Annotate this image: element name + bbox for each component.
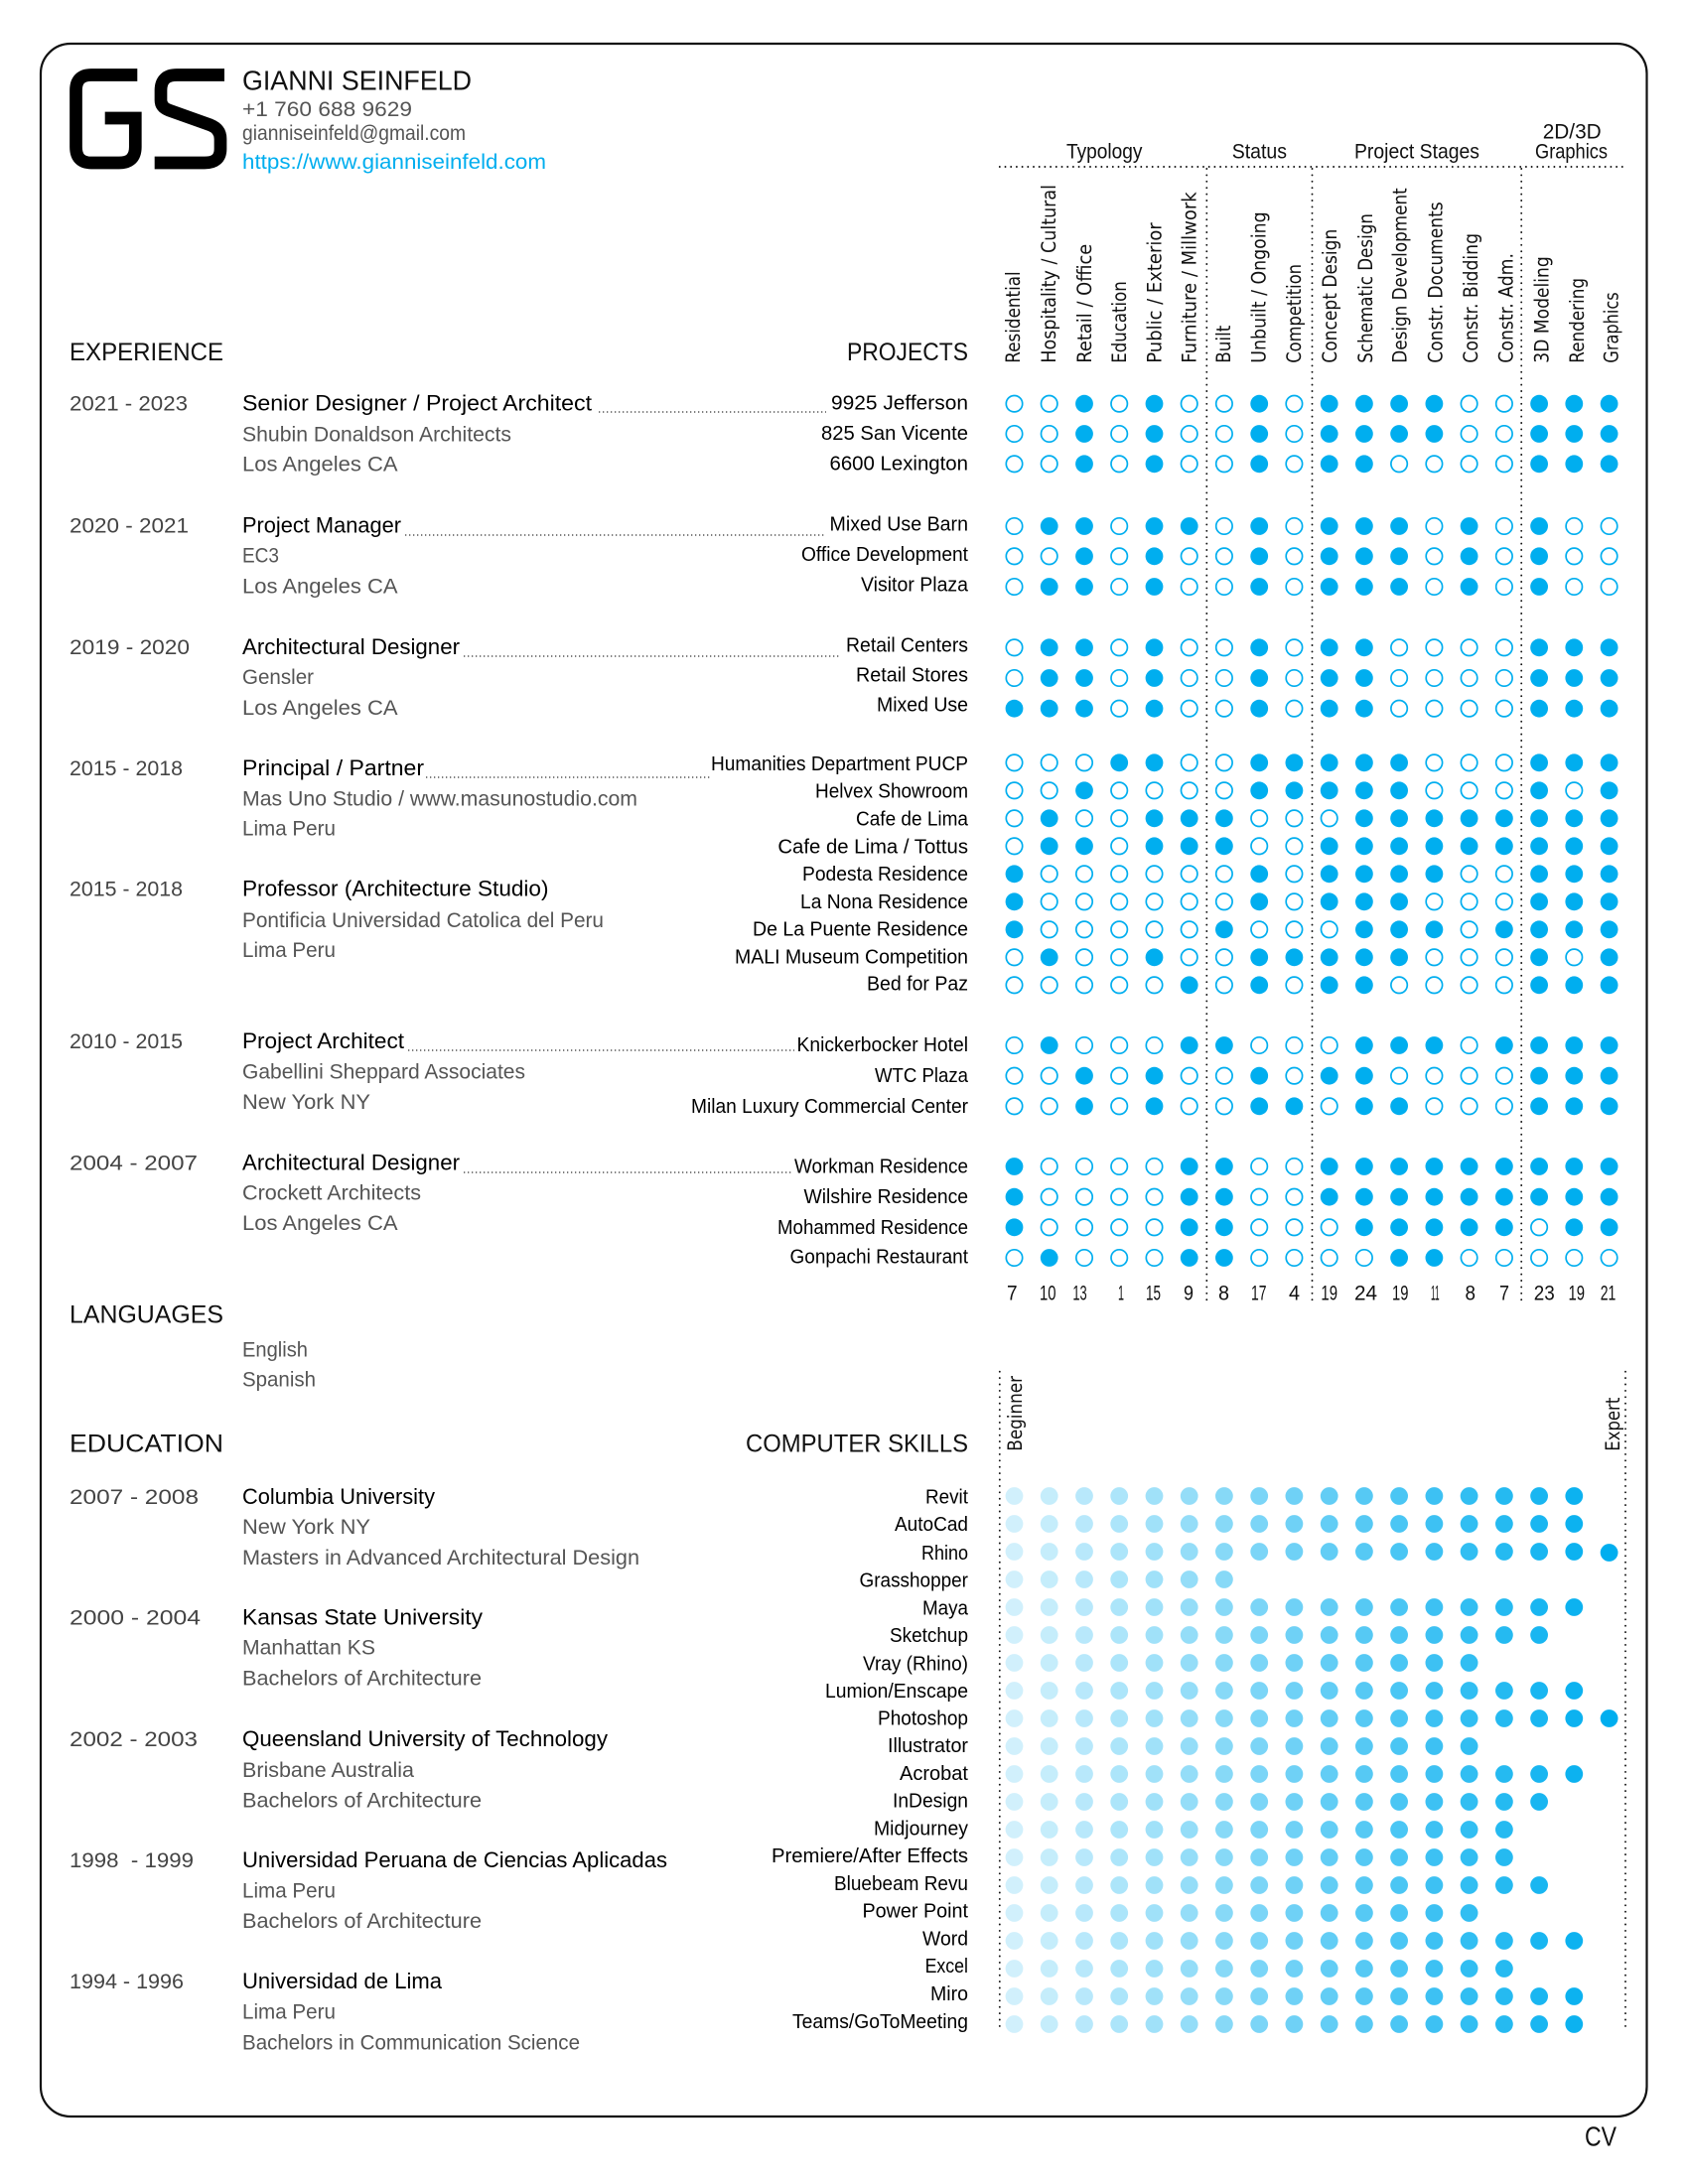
skill names: Acrobat <box>900 1762 968 1785</box>
entry: Architectural Designer, Crockett: Los Angeles CA <box>242 1212 397 1235</box>
panel: projects list: Workman Residence <box>794 1156 968 1178</box>
rotated column labels: Graphics <box>1601 292 1622 363</box>
header <box>75 66 546 174</box>
entry: Project Manager: Project Manager <box>242 513 401 538</box>
entry: Project Manager <box>70 513 826 599</box>
rotated column labels <box>1002 185 1622 363</box>
panel: projects list: Cafe de Lima <box>856 807 969 830</box>
entry: Professor <box>70 877 604 962</box>
entry: Queensland <box>70 1726 608 1813</box>
scale label: expert: Expert <box>1602 1397 1624 1451</box>
heading: education: EDUCATION <box>70 1431 223 1458</box>
category headers: Status <box>1232 140 1287 163</box>
entry: Professor: Professor (Architecture Studio) <box>242 877 548 901</box>
entry: Peruana <box>70 1847 667 1933</box>
panel: projects list: Milan Luxury Commercial Center <box>691 1095 968 1118</box>
panel: projects list <box>691 339 969 1269</box>
entry: Kansas State: Bachelors of Architecture <box>242 1668 482 1691</box>
rotated column labels: Retail / Office <box>1073 244 1096 363</box>
skill names: Teams/GoToMeeting <box>792 2010 968 2033</box>
column totals: 24 <box>1354 1282 1377 1304</box>
entry: Architectural Designer, Gensler <box>70 634 841 720</box>
heading: languages: LANGUAGES <box>70 1300 223 1328</box>
category headers: Graphics <box>1535 140 1608 163</box>
entry: Peruana: Bachelors of Architecture <box>242 1910 482 1933</box>
rotated column labels: Rendering <box>1566 278 1589 363</box>
entry: Senior Designer: Senior Designer / Project Architect <box>242 390 592 415</box>
name: GIANNI SEINFELD <box>242 66 472 96</box>
entry: Project Architect: Gabellini Sheppard Associates <box>242 1060 525 1084</box>
panel: projects list: Humanities Department PUCP <box>711 752 968 775</box>
entry: Architectural Designer, Gensler: 2019 - 2020 <box>70 636 190 659</box>
skill names: Miro <box>930 1982 968 2005</box>
entry: Lima: Bachelors in Communication Science <box>242 2031 580 2055</box>
rotated column labels: Furniture / Millwork <box>1178 192 1201 363</box>
entry: Peruana: Lima Peru <box>242 1880 336 1902</box>
panel: languages: Spanish <box>242 1369 316 1392</box>
panel: projects list: Podesta Residence <box>802 863 968 886</box>
panel: projects list: Helvex Showroom <box>815 780 968 802</box>
entry: Project Manager: 2020 - 2021 <box>70 515 189 538</box>
panel: projects list: 9925 Jefferson <box>831 392 968 415</box>
rotated column labels: Unbuilt / Ongoing <box>1248 211 1271 363</box>
skill names: AutoCad <box>895 1513 968 1536</box>
skill names: Revit <box>925 1485 968 1508</box>
entry: Queensland: Queensland University of Technology <box>242 1726 608 1751</box>
entry: Lima <box>70 1969 580 2055</box>
rotated column labels: Competition <box>1283 264 1306 363</box>
entry: Professor: Pontificia Universidad Catolica del Peru <box>242 909 604 932</box>
column totals: 7 <box>1007 1282 1018 1304</box>
entry: Architectural Designer, Gensler: Architectural Designer <box>242 634 460 659</box>
entry: Project Architect: New York NY <box>242 1091 370 1114</box>
entry: Queensland: 2002 - 2003 <box>70 1728 198 1751</box>
entry: Principal / Partner: Mas Uno Studio / www.masunostudio.com <box>242 788 637 811</box>
panel: projects list: Retail Stores <box>856 664 968 687</box>
scale label: beginner: Beginner <box>1004 1375 1027 1451</box>
skill names: Photoshop <box>878 1707 968 1729</box>
column totals: 9 <box>1184 1282 1194 1304</box>
entry: Peruana: 1998 - 1999 <box>70 1849 194 1872</box>
entry: Queensland: Bachelors of Architecture <box>242 1789 482 1813</box>
entry: Senior Designer: 2021 - 2023 <box>70 392 188 415</box>
category headers: Typology <box>1066 140 1143 163</box>
panel: projects list: Retail Centers <box>846 634 968 657</box>
entry: Architectural Designer, Gensler: Gensler <box>242 666 314 689</box>
panel: projects list: De La Puente Residence <box>753 918 968 941</box>
panel: experience <box>70 339 841 1235</box>
panel: projects list: Gonpachi Restaurant <box>790 1245 968 1269</box>
entry: Columbia <box>70 1484 639 1570</box>
column totals: 7 <box>1499 1282 1509 1304</box>
entry: Architectural Designer, Crockett: Crockett Architects <box>242 1181 421 1205</box>
skill names: Grasshopper <box>860 1570 968 1592</box>
panel: projects list: 6600 Lexington <box>830 452 968 475</box>
skill names: Lumion/Enscape <box>825 1680 968 1703</box>
CV label: CV <box>1585 2121 1617 2152</box>
entry: Architectural Designer, Crockett: Architectural Designer <box>242 1151 460 1175</box>
column totals: 11 <box>1431 1282 1440 1304</box>
entry: Principal / Partner <box>70 755 710 841</box>
skill names: Illustrator <box>888 1734 968 1757</box>
entry: Principal / Partner: Principal / Partner <box>242 755 424 780</box>
entry: Lima: 1994 - 1996 <box>70 1971 184 1993</box>
rotated column labels: Concept Design <box>1319 229 1341 363</box>
panel: project matrix <box>1000 120 1626 1304</box>
entry: Senior Designer <box>70 390 826 477</box>
entry: Kansas State: Manhattan KS <box>242 1637 375 1660</box>
panel: languages <box>70 1300 316 1392</box>
entry: Columbia: Columbia University <box>242 1484 435 1509</box>
rotated column labels: Built <box>1212 325 1235 363</box>
column totals: 4 <box>1289 1282 1300 1304</box>
skill names: Rhino <box>921 1542 968 1565</box>
panel: projects list: Bed for Paz <box>867 973 968 995</box>
panel: projects list: Visitor Plaza <box>861 574 969 597</box>
entry: Architectural Designer, Crockett <box>70 1151 791 1235</box>
column totals: 15 <box>1146 1282 1161 1304</box>
heading: projects: PROJECTS <box>847 339 968 366</box>
skill names: Vray (Rhino) <box>863 1652 968 1675</box>
rotated column labels: Residential <box>1002 271 1025 363</box>
panel: projects list: 825 San Vicente <box>821 422 968 445</box>
entry: Principal / Partner: Lima Peru <box>242 818 336 841</box>
skill names: Power Point <box>862 1900 968 1923</box>
panel: projects list: Mohammed Residence <box>777 1216 968 1239</box>
entry: Architectural Designer, Gensler: Los Angeles CA <box>242 697 397 720</box>
category headers <box>1066 120 1608 163</box>
column totals: 8 <box>1466 1282 1476 1304</box>
skill names: Word <box>922 1928 968 1950</box>
column totals: 10 <box>1040 1282 1056 1304</box>
entry: Professor: Lima Peru <box>242 939 336 962</box>
column totals: 8 <box>1218 1282 1229 1304</box>
category headers: 2D/3D <box>1543 120 1602 143</box>
heading: computer skills: COMPUTER SKILLS <box>746 1431 968 1458</box>
entry: Columbia: 2007 - 2008 <box>70 1486 199 1509</box>
dot grid <box>1006 395 1618 1267</box>
panel: projects list: WTC Plaza <box>875 1064 969 1087</box>
panel: projects list: Mixed Use <box>877 694 968 717</box>
column totals <box>1007 1282 1616 1304</box>
column totals: 23 <box>1534 1282 1555 1304</box>
icon: GS monogram logo <box>75 75 224 163</box>
entry: Columbia: New York NY <box>242 1516 370 1539</box>
entry: Kansas State <box>70 1605 483 1691</box>
entry: Professor: 2015 - 2018 <box>70 879 183 901</box>
skill names: Sketchup <box>890 1624 968 1647</box>
panel: projects list: Office Development <box>801 543 968 566</box>
rotated column labels: Public / Exterior <box>1144 221 1167 363</box>
rotated column labels: Constr. Bidding <box>1460 233 1482 363</box>
skill names: Bluebeam Revu <box>834 1872 968 1895</box>
entry: Project Manager: Los Angeles CA <box>242 576 397 599</box>
rotated column labels: Schematic Design <box>1354 213 1377 363</box>
skill level dots <box>1006 1487 1618 2033</box>
column totals: 17 <box>1251 1282 1267 1304</box>
rotated column labels: Constr. Documents <box>1424 202 1447 363</box>
column totals: 21 <box>1601 1282 1616 1304</box>
column totals: 19 <box>1392 1282 1408 1304</box>
rotated column labels: Hospitality / Cultural <box>1038 185 1060 363</box>
rotated column labels: 3D Modeling <box>1531 256 1553 363</box>
panel: projects list: La Nona Residence <box>800 890 968 913</box>
entry: Columbia: Masters in Advanced Architectural Design <box>242 1547 639 1570</box>
skill names: Premiere/After Effects <box>772 1844 968 1867</box>
entry: Senior Designer: Shubin Donaldson Architects <box>242 423 511 447</box>
panel: projects list: Wilshire Residence <box>804 1185 968 1208</box>
heading: experience: EXPERIENCE <box>70 339 223 366</box>
rotated column labels: Design Development <box>1389 188 1412 363</box>
panel: projects list: Mixed Use Barn <box>830 513 968 536</box>
column totals: 19 <box>1321 1282 1337 1304</box>
panel: computer skills <box>746 1372 1625 2033</box>
entry: Kansas State: Kansas State University <box>242 1605 483 1630</box>
rotated column labels: Constr. Adm. <box>1495 253 1518 363</box>
entry: Lima: Universidad de Lima <box>242 1969 443 1993</box>
column totals: 13 <box>1072 1282 1087 1304</box>
skill names: Midjourney <box>874 1817 969 1841</box>
panel: languages: English <box>242 1339 308 1362</box>
entry: Project Architect: 2010 - 2015 <box>70 1030 183 1053</box>
column totals: 19 <box>1569 1282 1585 1304</box>
skill names: Excel <box>925 1955 968 1978</box>
category headers: Project Stages <box>1354 140 1479 163</box>
column totals: 1 <box>1118 1282 1124 1304</box>
entry: Project Architect <box>70 1028 794 1114</box>
rotated column labels: Education <box>1108 281 1131 363</box>
entry: Kansas State: 2000 - 2004 <box>70 1607 201 1630</box>
entry: Principal / Partner: 2015 - 2018 <box>70 757 183 780</box>
skill names: InDesign <box>893 1790 968 1813</box>
entry: Lima: Lima Peru <box>242 2001 336 2023</box>
skill names: Maya <box>922 1596 969 1620</box>
panel: projects list: MALI Museum Competition <box>735 946 968 969</box>
entry: Architectural Designer, Crockett: 2004 - 2007 <box>70 1153 198 1175</box>
panel: projects list: Cafe de Lima / Tottus <box>777 835 968 858</box>
entry: Senior Designer: Los Angeles CA <box>242 453 397 477</box>
phone: +1 760 688 9629 <box>242 98 412 121</box>
entry: Project Manager: EC3 <box>242 545 279 568</box>
website link: https://www.gianniseinfeld.com <box>242 151 546 174</box>
entry: Queensland: Brisbane Australia <box>242 1759 414 1782</box>
panel: education <box>70 1431 667 2055</box>
entry: Peruana: Universidad Peruana de Ciencias Aplicadas <box>242 1847 667 1872</box>
panel: projects list: Knickerbocker Hotel <box>796 1033 968 1056</box>
entry: Project Architect: Project Architect <box>242 1028 404 1053</box>
skill names <box>772 1485 969 2033</box>
email: gianniseinfeld@gmail.com <box>242 122 466 145</box>
